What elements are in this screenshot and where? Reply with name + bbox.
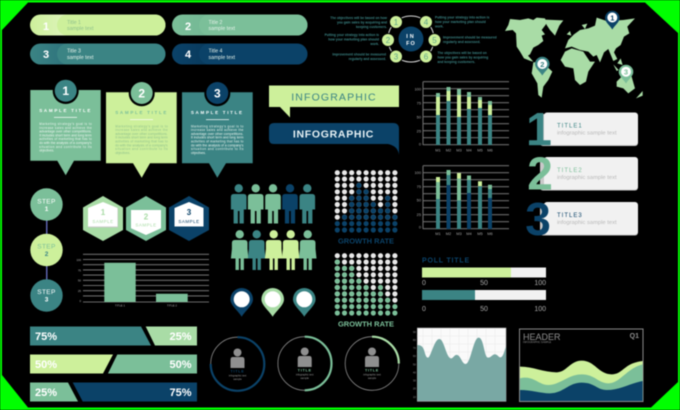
hexagon badge 1: 1 bbox=[101, 208, 106, 217]
banner navy bbox=[269, 123, 399, 155]
hexagon badge 2: SAMPLE bbox=[135, 222, 157, 228]
area chart axis: 90 bbox=[413, 330, 416, 334]
teal segments bbox=[436, 175, 492, 229]
callout card 3: situation and contribute to its bbox=[191, 147, 244, 151]
split bar 25/75: 75% bbox=[169, 387, 192, 399]
hexagon badge 3: SAMPLE bbox=[178, 219, 200, 224]
callout card 2: activities of marketing that has to bbox=[115, 140, 168, 144]
node numbers bbox=[386, 18, 437, 62]
dot matrix green bbox=[337, 256, 395, 328]
callout card 2: SAMPLE TITLE bbox=[115, 110, 168, 115]
map pin 3: 3 bbox=[624, 68, 628, 76]
pill 4: Title 4 bbox=[208, 48, 223, 54]
hexagon badge 1: SAMPLE bbox=[92, 219, 114, 224]
wheel text right: work. bbox=[434, 24, 444, 28]
lime segments bbox=[436, 91, 492, 117]
wave layers bbox=[520, 361, 643, 401]
wheel text left: how your marketing plan should bbox=[328, 38, 379, 42]
title card 2: TITLE2 bbox=[557, 168, 583, 174]
progress ring 50: sample bbox=[301, 376, 309, 380]
node numbers: 3 bbox=[394, 52, 399, 62]
title card 3: 3 bbox=[525, 193, 551, 245]
progress ring 25: TITLE bbox=[365, 368, 379, 372]
world map bbox=[505, 11, 643, 98]
column chart labels: 75 bbox=[78, 268, 81, 272]
wheel text right bbox=[434, 16, 497, 64]
growth rate label green: GROWTH RATE bbox=[338, 320, 394, 328]
title card 3: infographic sample text bbox=[557, 220, 617, 226]
pin navy bbox=[230, 288, 253, 317]
columns bbox=[104, 263, 188, 302]
wheel text left: The objectives will be based on how bbox=[330, 16, 387, 20]
pill 3: Title 3 bbox=[67, 48, 81, 54]
wheel text left bbox=[325, 16, 387, 61]
growth rate label navy: GROWTH RATE bbox=[338, 236, 394, 246]
area shape bbox=[417, 338, 506, 401]
title card 3: TITLE3 bbox=[557, 213, 583, 219]
column chart bbox=[76, 254, 209, 308]
axis labels: M1 bbox=[435, 231, 441, 236]
split bar 50/50: 50% bbox=[35, 359, 57, 371]
node numbers: 6 bbox=[424, 52, 429, 62]
wheel text right: how your marketing plan should bbox=[435, 20, 486, 24]
column chart labels: TITLE 2 bbox=[167, 304, 177, 308]
callout card 3: Marketing strategy's goal is to bbox=[191, 124, 244, 128]
callout card 1: SAMPLE TITLE bbox=[39, 108, 92, 113]
callout card 3: SAMPLE TITLE bbox=[191, 110, 244, 115]
axis labels: M1 bbox=[435, 148, 441, 152]
column chart labels: 25 bbox=[78, 289, 81, 293]
header wave panel bbox=[520, 329, 643, 402]
area chart axis: 40 bbox=[413, 370, 416, 374]
step 2: 2 bbox=[45, 251, 49, 258]
title card 2: 2 bbox=[527, 148, 553, 200]
progress ring 75 bbox=[211, 337, 264, 391]
wheel text right: and keeping customers. bbox=[438, 60, 475, 64]
axis labels: 75 bbox=[417, 101, 421, 106]
map pin 2: 2 bbox=[540, 60, 544, 69]
hexagon badge 3: 3 bbox=[187, 208, 192, 217]
split bar 75/25: 25% bbox=[169, 331, 192, 343]
poll bar 2: 100 bbox=[534, 306, 546, 313]
step 1: STEP bbox=[37, 198, 56, 206]
area chart bbox=[413, 328, 506, 401]
title card 3 bbox=[525, 193, 638, 245]
hexagon badge 2 bbox=[126, 196, 166, 241]
pill 4 bbox=[172, 44, 308, 64]
wheel text right: Putting your strategy into action is bbox=[435, 16, 490, 20]
poll bar 2 bbox=[422, 290, 546, 313]
axis labels: M5 bbox=[477, 231, 483, 236]
area chart axis: 80 bbox=[413, 338, 416, 342]
location pins bbox=[230, 288, 316, 317]
axis labels: M3 bbox=[456, 148, 462, 152]
area chart axis: 70 bbox=[413, 346, 416, 350]
numbered nodes bbox=[382, 16, 441, 63]
axis labels: 25 bbox=[417, 212, 421, 217]
step 1: 1 bbox=[45, 206, 49, 213]
progress ring 50: TITLE bbox=[298, 368, 312, 372]
column chart labels bbox=[76, 258, 177, 308]
axis labels: 75 bbox=[417, 184, 421, 189]
pictogram men bbox=[231, 184, 315, 224]
area chart axis: 20 bbox=[413, 386, 416, 390]
column chart labels: TITLE 1 bbox=[115, 304, 125, 308]
pill 1 bbox=[30, 14, 166, 36]
poll bar 1 bbox=[422, 268, 546, 287]
hexagon badge 3 bbox=[169, 196, 209, 241]
quarter label: Q1 bbox=[630, 333, 639, 340]
node numbers: 1 bbox=[394, 18, 399, 27]
progress ring 50 bbox=[278, 337, 332, 390]
lime segments bbox=[436, 173, 482, 186]
callout card 2: situation and contribute to its bbox=[115, 147, 168, 151]
callout card 2: It includes short term and long term bbox=[115, 136, 168, 140]
callout card 3 bbox=[182, 80, 253, 178]
wheel text right: how you gain sales by acquiring bbox=[438, 56, 488, 60]
axis labels: M3 bbox=[456, 231, 462, 236]
navy segments bbox=[446, 185, 492, 229]
poll bar 1: 100 bbox=[534, 280, 546, 287]
area chart axis: 50 bbox=[413, 362, 416, 366]
title card 1: infographic sample text bbox=[557, 130, 617, 136]
callout card 3: activities of marketing that has to bbox=[191, 140, 244, 144]
area chart axis bbox=[413, 330, 416, 399]
pill 3 bbox=[30, 44, 166, 64]
header title: HEADER bbox=[523, 332, 561, 342]
axis labels: M4 bbox=[466, 148, 473, 152]
wheel text left: keeping customers. bbox=[356, 25, 387, 29]
step 3: STEP bbox=[37, 289, 56, 296]
progress ring 75: sample bbox=[233, 377, 242, 381]
info hub: IN bbox=[406, 34, 416, 40]
poll bbox=[422, 258, 546, 313]
callout card 1 bbox=[30, 78, 101, 175]
header subtitle: INFOGRAPHIC SAMPLE bbox=[523, 341, 552, 344]
wheel text right: Improvement should be measured bbox=[443, 36, 497, 40]
wheel text left: work. bbox=[369, 42, 379, 46]
area chart axis: 30 bbox=[413, 378, 416, 382]
progress ring 50: infographic text bbox=[296, 372, 314, 376]
pill 1: Title 1 bbox=[67, 20, 81, 26]
axis labels: M2 bbox=[446, 231, 451, 236]
callout card 1: Marketing strategy's goal is to bbox=[39, 122, 92, 126]
pin teal bbox=[293, 288, 316, 317]
poll bar 1: 50 bbox=[480, 280, 488, 287]
pill 2 bbox=[172, 14, 308, 36]
axis labels: 100 bbox=[414, 170, 422, 175]
hexagon badge 2: 2 bbox=[144, 212, 149, 222]
pill 3: sample text bbox=[67, 55, 94, 61]
callout card 1: objectives. bbox=[39, 149, 54, 153]
pin light green bbox=[261, 288, 284, 317]
progress ring 25 bbox=[345, 337, 399, 390]
step 1 bbox=[30, 188, 63, 221]
dot matrix navy bbox=[337, 173, 395, 246]
callout card 1: 1 bbox=[62, 84, 69, 98]
step 2 bbox=[30, 234, 63, 266]
numbered pills bbox=[30, 14, 308, 64]
poll title: POLL TITLE bbox=[422, 258, 470, 264]
callout card 1: increase sales and achieve the bbox=[39, 126, 92, 130]
callout card 3: objectives. bbox=[191, 151, 206, 155]
area chart axis: 10 bbox=[413, 395, 416, 399]
callout card 2: Marketing strategy's goal is to bbox=[115, 124, 168, 128]
poll bar 2: 0 bbox=[422, 306, 426, 313]
area chart axis: 60 bbox=[413, 354, 416, 358]
title card 1: TITLE1 bbox=[557, 124, 583, 130]
stacked bar chart 2 bbox=[414, 166, 509, 236]
title card 2 bbox=[527, 148, 638, 200]
node numbers: 5 bbox=[432, 36, 437, 45]
wheel text left: you gain sales by acquiring and bbox=[337, 20, 387, 24]
split bar 25/75 bbox=[30, 382, 197, 402]
map pin 1: 1 bbox=[610, 13, 614, 22]
axis labels bbox=[414, 170, 493, 236]
teal segments bbox=[436, 101, 492, 145]
split bar 50/50 bbox=[30, 354, 197, 374]
axis labels: M4 bbox=[466, 231, 473, 236]
wheel text left: Putting your strategy into action is bbox=[325, 33, 379, 37]
column chart labels: 0 bbox=[79, 299, 81, 303]
pill 1: 1 bbox=[43, 21, 49, 33]
progress ring 25: infographic text bbox=[363, 372, 381, 376]
progress ring 25: sample bbox=[368, 376, 377, 380]
callout card 3: advantage over other competitions. bbox=[191, 132, 244, 136]
pill 4: 4 bbox=[185, 49, 192, 61]
node numbers: 4 bbox=[424, 18, 429, 27]
info wheel bbox=[325, 16, 497, 64]
wheel text left: regularly and assessed. bbox=[349, 57, 386, 61]
banner lime: INFOGRAPHIC bbox=[291, 92, 377, 104]
callout card 3: 3 bbox=[214, 86, 221, 100]
step 2: STEP bbox=[37, 244, 56, 250]
progress ring 75: TITLE bbox=[230, 370, 245, 374]
callout card 1: advantage over other competitions. bbox=[39, 130, 92, 134]
callout card 2: increase sales and achieve the bbox=[115, 128, 168, 132]
column chart labels: 100 bbox=[76, 258, 81, 262]
percentage bars bbox=[30, 326, 197, 402]
callout card 3: do with the analysis of a company's bbox=[191, 143, 244, 147]
axis labels: M6 bbox=[487, 231, 493, 236]
callout card 3: It includes short term and long term bbox=[191, 136, 244, 140]
banner lime bbox=[269, 86, 399, 118]
axis labels: 100 bbox=[414, 87, 422, 92]
steps timeline bbox=[30, 188, 63, 312]
step 3 bbox=[30, 279, 63, 312]
title card 1: 1 bbox=[526, 103, 552, 155]
callout card 2: do with the analysis of a company's bbox=[115, 143, 168, 147]
axis labels: 50 bbox=[417, 198, 422, 203]
wheel text right: regularly and assessed. bbox=[443, 40, 480, 44]
callout card 3: increase sales and achieve the bbox=[191, 128, 244, 132]
callout card 1: activities of marketing that has to bbox=[39, 137, 92, 141]
stacked bar chart 1 bbox=[414, 82, 509, 152]
pill 2: sample text bbox=[208, 26, 236, 32]
continents bbox=[505, 18, 643, 98]
split bar 75/25: 75% bbox=[35, 331, 57, 343]
green caps bbox=[436, 87, 492, 105]
axis labels: M2 bbox=[446, 148, 451, 152]
hexagon badge 1 bbox=[83, 196, 123, 241]
pill 3: 3 bbox=[43, 49, 49, 61]
wheel text left: Improvement should be measured bbox=[332, 52, 386, 56]
wheel text right: The objectives will be based on bbox=[438, 51, 487, 55]
callout card 1: situation and contribute to its bbox=[39, 145, 92, 149]
callout card 2: 2 bbox=[138, 86, 145, 100]
pill 1: sample text bbox=[67, 26, 94, 32]
step 3: 3 bbox=[45, 296, 49, 304]
pill 4: sample text bbox=[208, 55, 236, 61]
column chart labels: 50 bbox=[78, 278, 81, 282]
callout card 2 bbox=[106, 80, 177, 178]
info hub bbox=[398, 26, 424, 52]
title card 1 bbox=[526, 103, 638, 155]
info hub: FO bbox=[406, 41, 416, 47]
banner navy: INFOGRAPHIC bbox=[293, 128, 374, 140]
axis labels: 25 bbox=[417, 128, 421, 133]
poll bar 1: 0 bbox=[422, 280, 426, 287]
callout card 1: It includes short term and long term bbox=[39, 133, 92, 137]
axis labels: M6 bbox=[487, 148, 493, 152]
progress ring 75: infographic text bbox=[229, 374, 247, 378]
node numbers: 2 bbox=[386, 36, 391, 45]
split bar 75/25 bbox=[30, 326, 197, 346]
split bar 25/75: 25% bbox=[35, 387, 57, 399]
axis labels: 0 bbox=[419, 224, 422, 230]
pill 2: 2 bbox=[185, 21, 191, 33]
axis labels bbox=[414, 87, 493, 152]
callout card 2: advantage over other competitions. bbox=[115, 132, 168, 136]
callout card 2: objectives. bbox=[115, 151, 130, 155]
split bar 50/50: 50% bbox=[169, 359, 192, 371]
poll bar 2: 50 bbox=[480, 306, 488, 313]
green segments bbox=[436, 170, 492, 200]
axis labels: 50 bbox=[417, 115, 422, 120]
axis labels: 0 bbox=[419, 141, 422, 146]
pill 2: Title 2 bbox=[208, 20, 223, 26]
axis labels: M5 bbox=[477, 148, 483, 152]
pictogram women bbox=[231, 230, 317, 270]
title card 2: infographic sample text bbox=[557, 175, 617, 181]
callout card 1: do with the analysis of a company's bbox=[39, 141, 92, 145]
